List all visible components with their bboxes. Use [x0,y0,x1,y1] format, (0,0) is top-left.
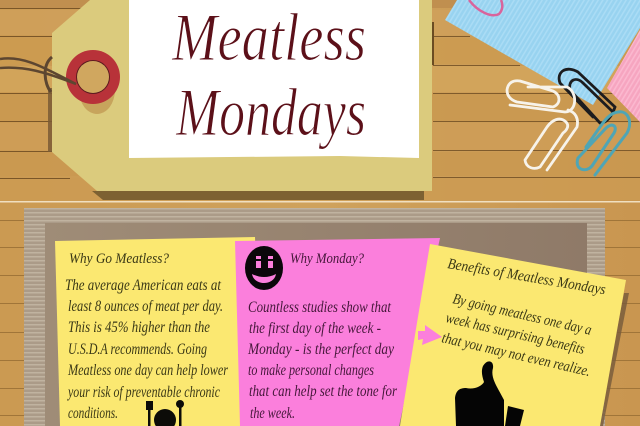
body: why monday [247,299,398,422]
icon: smiley face [245,246,283,290]
white label [129,0,419,158]
note: benefits [400,244,626,426]
heading: benefits: Benefits of Meatless Mondays [446,256,607,298]
body: why go meatless: least 8 ounces of meat per day. [68,298,223,315]
manila tag [52,0,432,191]
title [171,0,366,150]
note: why monday [235,238,440,426]
body: why go meatless: U.S.D.A recommends. Going [68,341,207,358]
tag shadow [92,191,424,200]
arrow [418,325,442,345]
pink striped paper [607,30,640,122]
body: why go meatless [65,277,229,422]
title: Meatless [171,0,366,75]
body: why monday: the week. [250,405,295,422]
icon: plate and cutlery [146,400,184,426]
heading: why monday: Why Monday? [290,251,364,267]
heading: why go meatless: Why Go Meatless? [69,251,169,267]
body: why monday: to make personal changes [248,362,374,379]
body: why monday: the first day of the week - [249,320,381,337]
body: why monday: Monday - is the perfect day [247,341,394,358]
clip: teal [577,112,630,175]
note shadow [598,293,629,426]
body: benefits: week has surprising benefits [444,310,586,358]
body: why go meatless: The average American eats at [65,277,222,294]
body: why go meatless: conditions. [68,405,118,422]
body: why go meatless: This is 45% higher than the [68,319,210,336]
body: benefits: By going meatless one day a [451,291,593,339]
clip: black [559,69,615,123]
cork board [24,208,605,426]
body: benefits [440,291,593,380]
paper clips [507,69,630,175]
tag eyelet [66,50,120,114]
body: benefits: that you may not even realize. [440,330,592,380]
clip: white vertical [525,110,578,170]
blue striped paper [445,0,640,105]
title: Mondays [175,74,366,150]
body: why go meatless: Meatless one day can help lower [67,362,229,379]
tag edge shadow [48,22,434,152]
note: why go meatless [55,237,262,426]
string [0,57,76,92]
body: why monday: Countless studies show that [248,299,392,316]
body: why monday: that can help set the tone for [249,383,398,400]
clip: white horizontal [507,81,575,112]
body: why go meatless: your risk of preventable chronic [66,384,220,401]
icon: thumbs up [455,361,524,426]
